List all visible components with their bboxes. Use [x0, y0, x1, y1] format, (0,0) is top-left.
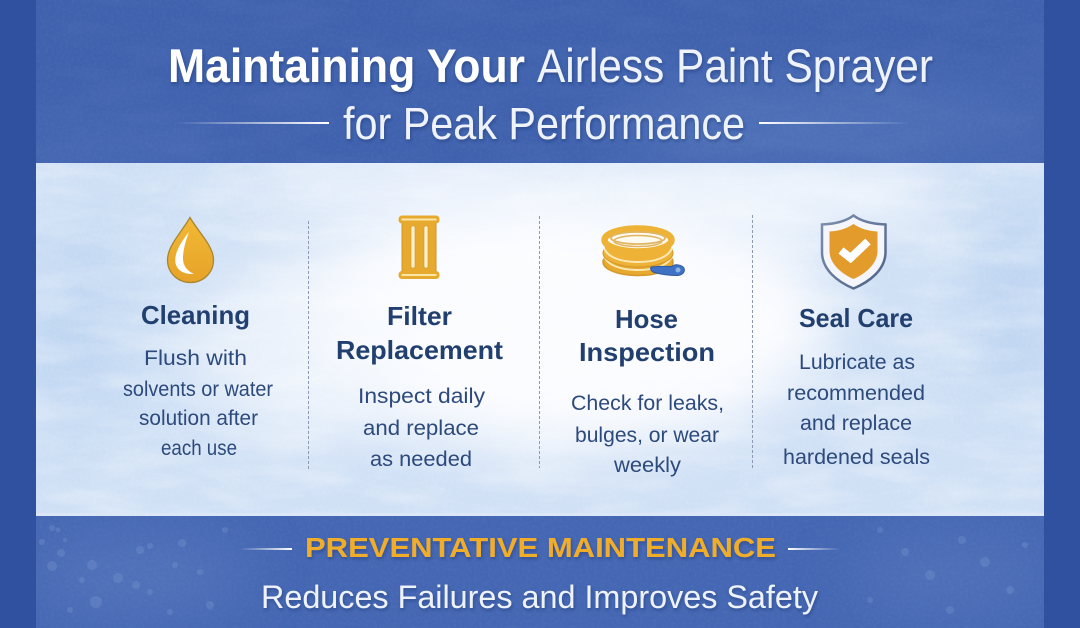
text: hose description — [571, 392, 724, 477]
title — [168, 39, 933, 149]
column: filter replacement — [336, 217, 503, 471]
heading: hose inspection — [579, 304, 715, 367]
text: cleaning description — [123, 347, 273, 460]
heading: filter replacement: Filter — [387, 301, 452, 331]
heading: cleaning: Cleaning — [141, 300, 250, 330]
text: hose description: bulges, or wear — [575, 424, 719, 447]
text: cleaning description: each use — [161, 437, 237, 460]
text: seal description: and replace — [800, 412, 912, 435]
footer heading: PREVENTATIVE MAINTENANCE — [305, 532, 776, 563]
heading: seal care: Seal Care — [799, 303, 913, 333]
heading: filter replacement — [336, 301, 503, 365]
text: hose description: Check for leaks, — [571, 392, 724, 415]
icon: shield with check — [822, 216, 886, 288]
title: Airless Paint Sprayer — [537, 39, 933, 92]
heading: hose inspection: Hose — [615, 304, 678, 334]
text: filter description — [358, 385, 486, 471]
column: hose inspection — [571, 228, 724, 477]
dividers — [308, 215, 752, 470]
panel: title band — [36, 0, 1044, 163]
text: seal description: hardened seals — [783, 446, 930, 469]
column: seal care — [783, 216, 930, 469]
heading: filter replacement: Replacement — [336, 335, 503, 365]
text: seal description — [783, 351, 930, 469]
icon: filter — [400, 217, 438, 278]
column: cleaning — [123, 218, 273, 460]
title: Maintaining Your — [168, 39, 525, 92]
text: hose description: weekly — [613, 454, 682, 477]
text: cleaning description: solution after — [139, 407, 258, 430]
text: seal description: recommended — [787, 382, 925, 405]
text: filter description: Inspect daily — [358, 385, 486, 408]
text: cleaning description: solvents or water — [123, 378, 273, 401]
text: filter description: as needed — [370, 448, 472, 471]
footer subheading: Reduces Failures and Improves Safety — [261, 579, 818, 615]
panel: maintenance tasks — [20, 163, 1055, 516]
icon: oil drop — [168, 218, 214, 282]
heading: hose inspection: Inspection — [579, 337, 715, 367]
title: for Peak Performance — [343, 98, 745, 149]
icon: coiled hose — [603, 228, 684, 276]
text: cleaning description: Flush with — [144, 347, 247, 370]
text: filter description: and replace — [363, 417, 479, 440]
panel: footer band — [30, 516, 1050, 628]
text: seal description: Lubricate as — [799, 351, 915, 374]
